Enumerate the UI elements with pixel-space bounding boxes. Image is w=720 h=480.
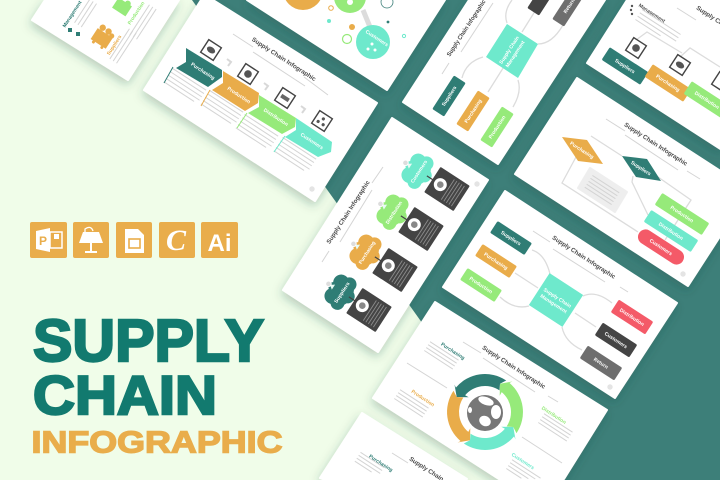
icon: purchasing [201, 40, 221, 60]
text block: purchasing [424, 342, 459, 369]
text block: customers [274, 136, 316, 173]
connectors [636, 32, 720, 67]
markers [68, 28, 80, 36]
card: Customers [419, 163, 470, 211]
diamond: Purchasing: Purchasing [569, 141, 595, 161]
slide: clouds [283, 118, 488, 352]
title rules [233, 34, 328, 95]
icon: Illustrator [201, 222, 238, 258]
icon: green box [112, 0, 134, 16]
label: Management: Management [62, 0, 84, 29]
box: Distribution: Distribution [693, 90, 720, 111]
card: Purchasing [367, 244, 418, 292]
icon: purchasing [670, 55, 690, 75]
connectors [562, 136, 691, 240]
text block: suppliers [110, 29, 136, 63]
segment: green [500, 382, 523, 433]
box: Distribution [611, 300, 653, 334]
box: Suppliers: Suppliers [613, 58, 636, 75]
slide: bottom cycle [320, 413, 467, 480]
icon: PowerPoint: P [39, 234, 47, 248]
globe [467, 395, 503, 431]
title rule [677, 8, 696, 20]
box: Distribution: Distribution [657, 221, 684, 242]
box: Suppliers: Suppliers [441, 85, 458, 108]
title rules [442, 3, 493, 74]
box: Production [655, 193, 709, 235]
decorative dots [327, 0, 393, 44]
arrow: Customers [285, 118, 332, 157]
box: Suppliers [432, 75, 466, 117]
box: dark [527, 0, 561, 16]
cloud: Suppliers [316, 267, 363, 315]
slide: arrow process [144, 0, 377, 201]
cloud: Suppliers: Suppliers [333, 281, 352, 305]
title rules [322, 167, 383, 262]
label: Management: Management [637, 3, 666, 25]
box: Distribution: Distribution [618, 307, 645, 328]
icon: customers [312, 111, 332, 131]
block: Supply Chain Management: Supply Chain [498, 35, 521, 65]
heading: INFOGRAPHIC: INFOGRAPHIC [32, 424, 282, 460]
box: Customers [595, 323, 637, 357]
page marker [680, 271, 686, 277]
arrow: Distribution [248, 95, 296, 134]
icon: Google Slides [116, 222, 152, 258]
box: Purchasing: Purchasing [655, 74, 681, 94]
cloud: Distribution: Distribution [385, 200, 404, 225]
connectors [500, 250, 612, 350]
label: Suppliers: Suppliers [106, 34, 123, 57]
box: Return: Return [592, 357, 609, 371]
circle: Customers [356, 25, 390, 59]
box: Production [480, 106, 514, 148]
cycle ring [447, 374, 523, 450]
rule [407, 363, 447, 388]
icon: orange box [89, 23, 117, 51]
text block: production [130, 5, 156, 39]
segment: mint [464, 427, 516, 450]
card: Suppliers [341, 284, 392, 332]
label: Distribution: Distribution [540, 405, 567, 426]
markers [630, 5, 633, 15]
title: Supply Chain Infographic [325, 179, 372, 245]
segment: teal [454, 374, 506, 397]
circle: Customers: Customers [364, 29, 389, 48]
box: Production: Production [488, 115, 507, 140]
diamond: Suppliers [622, 156, 661, 181]
icon: production [238, 64, 258, 84]
slide: vertical flow [403, 0, 605, 164]
icon: suppliers [626, 38, 646, 58]
title: Supply Chain Infographic [481, 344, 547, 391]
title rule [392, 453, 408, 463]
title rules [606, 119, 700, 179]
diamond: Purchasing [562, 137, 603, 164]
cloud: Distribution [368, 187, 415, 235]
box: Purchasing: Purchasing [464, 98, 484, 124]
slide: supply chain management [443, 191, 677, 398]
pill: Customers: Customers [648, 238, 673, 257]
icon: Illustrator: Ai [208, 230, 232, 257]
title: Supply Chain Infographic [623, 121, 689, 168]
icon: distribution [275, 88, 295, 108]
slide: small top-left process [32, 0, 179, 80]
box: Purchasing [645, 64, 691, 102]
segment: orange [447, 391, 470, 442]
box: Distribution [644, 210, 698, 252]
block: Supply Chain Management: Supply Chain [542, 287, 572, 310]
cloud: Customers: Customers [410, 159, 429, 184]
text box [578, 168, 627, 212]
label: Production: Production [127, 1, 146, 26]
slide: cycle [373, 302, 607, 480]
text block [635, 9, 681, 45]
box: Production: Production [468, 276, 493, 295]
icon: Canva [159, 222, 195, 258]
pill: Customers [635, 227, 687, 267]
text block: production [394, 390, 429, 417]
slide: top-right process [587, 0, 720, 150]
title rules [463, 342, 558, 402]
slide: decision flow [515, 78, 720, 286]
label: Customers: Customers [510, 452, 535, 471]
title rules [533, 231, 628, 292]
title: Supply Chain Infographic [250, 36, 317, 83]
heading: SUPPLY: SUPPLY [33, 308, 264, 374]
heading: CHAIN: CHAIN [33, 364, 217, 426]
text block: management [75, 0, 97, 27]
slide: circles [247, 0, 445, 90]
box: Customers: Customers [603, 331, 628, 350]
label: Purchasing: Purchasing [368, 454, 394, 474]
block: Supply Chain Management [486, 24, 538, 78]
block: Supply Chain Management: Management [505, 40, 527, 69]
icon: Canva: C [166, 224, 187, 257]
chevrons [227, 59, 305, 113]
page marker [607, 384, 613, 390]
label: Purchasing: Purchasing [440, 342, 466, 362]
box: Return [552, 0, 586, 27]
box: Suppliers [490, 221, 532, 255]
small dot [402, 34, 406, 38]
cloud: Purchasing: Purchasing [358, 240, 377, 265]
block: Supply Chain Management: Management [539, 293, 568, 315]
arrow: Distribution: Distribution [262, 107, 289, 128]
teal diagonal panel [192, 0, 720, 480]
box: Purchasing [475, 244, 517, 278]
text block: distribution [236, 113, 278, 150]
box: Purchasing [456, 90, 490, 132]
cloud: Customers [393, 146, 440, 194]
block: Supply Chain Management [529, 273, 583, 327]
arrow: Production [212, 71, 259, 111]
text block: purchasing [164, 67, 206, 104]
box: Suppliers: Suppliers [499, 230, 522, 247]
arrow: Purchasing: Purchasing [190, 62, 216, 82]
circle: green [334, 0, 366, 13]
box: Production [460, 268, 502, 302]
label: Production: Production [410, 389, 435, 408]
cloud: Purchasing [341, 227, 388, 275]
box: Production: Production [669, 205, 694, 224]
box: Suppliers [602, 47, 648, 85]
page marker [474, 181, 480, 187]
title: Supply Chain Infographic [551, 234, 617, 281]
circle: orange [283, 0, 323, 10]
icon: Keynote [73, 222, 109, 258]
arrow: Customers: Customers [299, 132, 324, 151]
connectors [462, 0, 563, 107]
text block: distribution [538, 414, 573, 441]
box: Purchasing: Purchasing [483, 252, 509, 272]
icon: distribution [712, 72, 720, 92]
text block [355, 452, 384, 476]
text block: production [201, 90, 243, 126]
box: Distribution [684, 81, 720, 119]
icon: PowerPoint [30, 222, 67, 258]
card: Distribution [393, 203, 444, 251]
page marker [309, 186, 315, 192]
box: Return [580, 346, 622, 380]
diamond: Suppliers: Suppliers [629, 160, 652, 177]
connector [363, 10, 370, 27]
rule [522, 437, 562, 463]
text block: customers [506, 460, 541, 480]
arrow: Production: Production [226, 86, 251, 105]
arrow: Purchasing [176, 48, 222, 87]
